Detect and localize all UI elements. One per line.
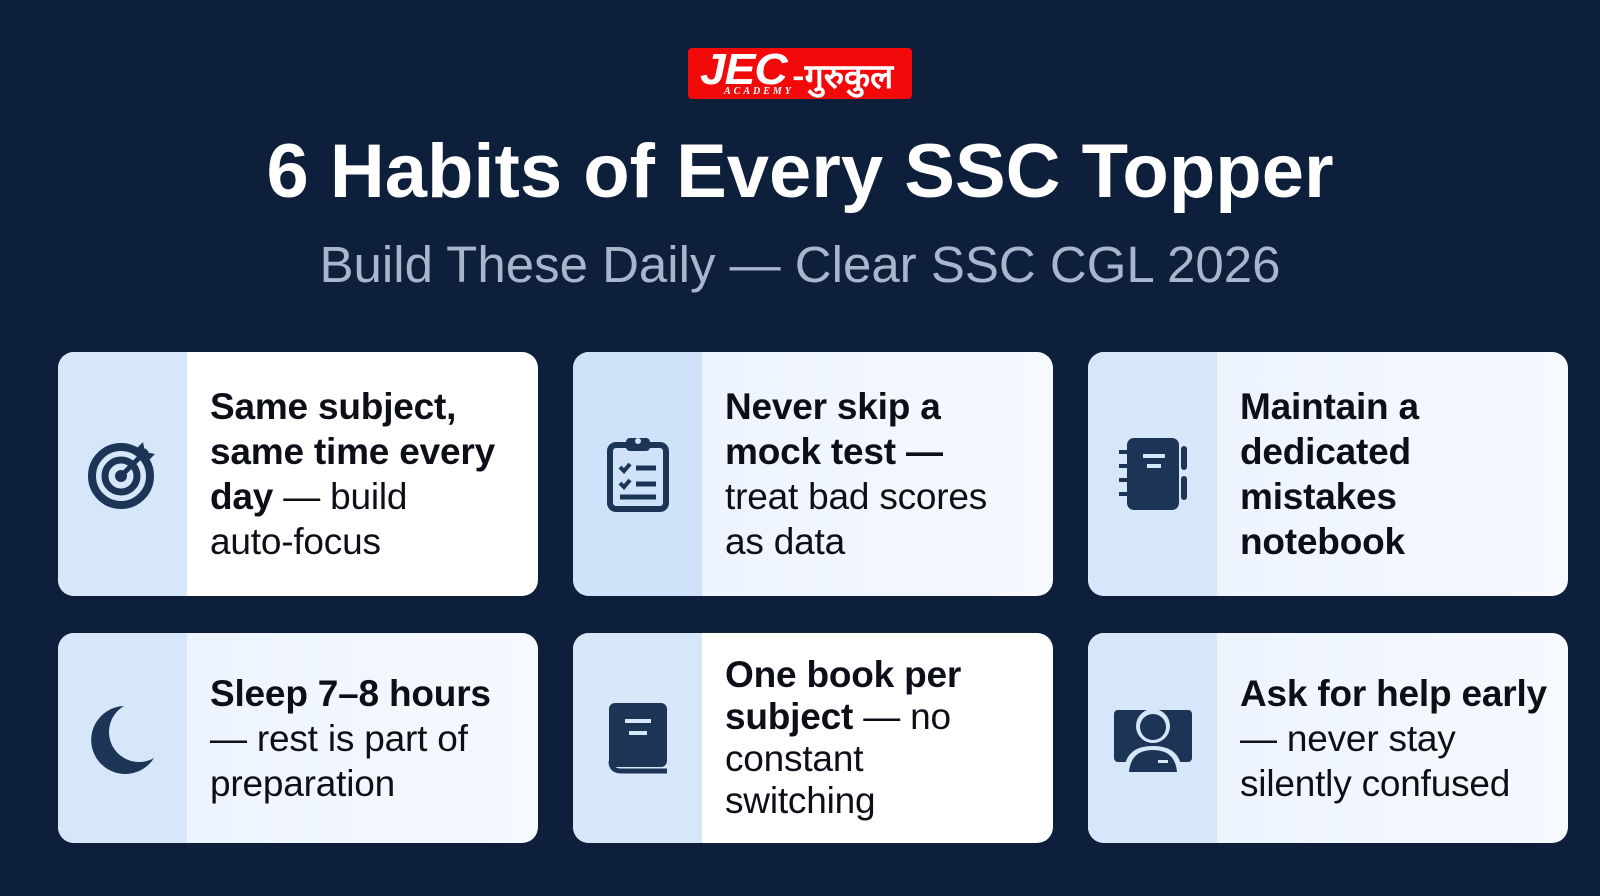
text: subject — no (725, 696, 951, 737)
panel: habit 6 (1088, 633, 1568, 843)
text (1240, 672, 1547, 804)
text: Never skip a (725, 386, 941, 427)
text: Sleep 7–8 hours (210, 672, 491, 714)
text: mistakes (1240, 476, 1397, 517)
logo (688, 48, 912, 99)
text: mock test — (725, 431, 943, 472)
text: treat bad scores (725, 476, 987, 517)
title: 6 Habits of Every SSC Topper (266, 129, 1334, 214)
text: Ask for help early (1240, 672, 1547, 714)
panel: habit 4 (58, 633, 538, 843)
text: constant (725, 738, 863, 779)
panel: habit 2 (573, 352, 1053, 596)
text: dedicated (1240, 431, 1411, 472)
icon: moon (58, 633, 187, 843)
text: as data (725, 521, 845, 562)
text: notebook (1240, 521, 1405, 562)
logo: -गुरुकुल (792, 49, 893, 98)
icon: clipboard (573, 352, 702, 596)
text: Maintain a (1240, 386, 1419, 427)
panel: habit 5 (573, 633, 1053, 843)
icon: target (58, 352, 187, 596)
panel: habit 1 (58, 352, 538, 596)
logo: ACADEMY (724, 86, 794, 97)
icon: book (573, 633, 702, 843)
subtitle: Build These Daily — Clear SSC CGL 2026 (320, 236, 1280, 293)
text (210, 672, 491, 804)
text (725, 654, 961, 821)
text: — never stay (1240, 718, 1456, 758)
text: — rest is part of (210, 718, 468, 758)
text: day — build (210, 476, 407, 517)
text (210, 386, 495, 562)
panel: habit 3 (1088, 352, 1568, 596)
text: same time every (210, 431, 495, 472)
text: One book per (725, 654, 961, 695)
text (725, 386, 987, 562)
text: auto-focus (210, 521, 381, 562)
text: switching (725, 780, 875, 821)
text: silently confused (1240, 762, 1510, 804)
icon: person (1088, 633, 1217, 843)
icon: notebook (1088, 352, 1217, 596)
text (1240, 386, 1420, 562)
text: preparation (210, 762, 395, 804)
text: Same subject, (210, 386, 456, 427)
